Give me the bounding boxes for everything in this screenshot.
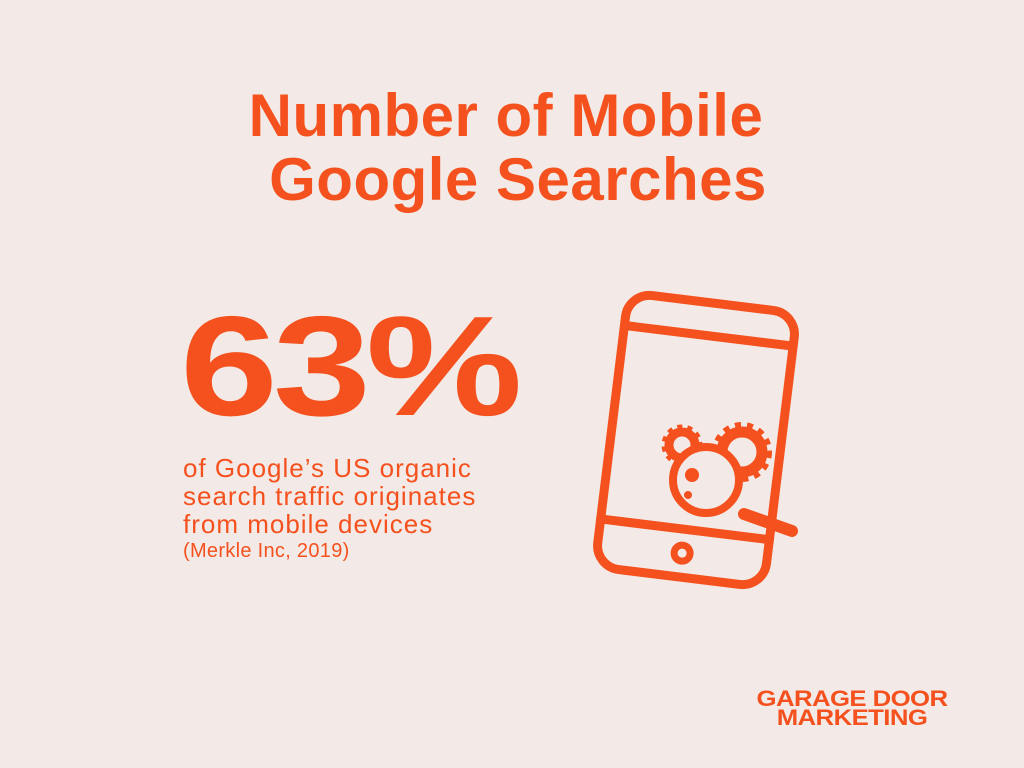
description text: from mobile devices	[183, 509, 433, 539]
title	[249, 82, 767, 213]
description text: of Google’s US organic	[183, 453, 472, 483]
logo: MARKETING	[777, 705, 927, 730]
big stat 63%: 63%	[180, 287, 518, 446]
title: Number of Mobile	[249, 82, 763, 149]
description text	[183, 453, 476, 562]
title: Google Searches	[269, 146, 767, 213]
description text: search traffic originates	[183, 481, 476, 511]
logo: GARAGE DOOR	[757, 686, 947, 711]
icon: gears	[664, 425, 769, 479]
citation: (Merkle Inc, 2019)	[183, 540, 350, 562]
logo	[757, 686, 948, 730]
icon: magnifier	[673, 447, 792, 531]
